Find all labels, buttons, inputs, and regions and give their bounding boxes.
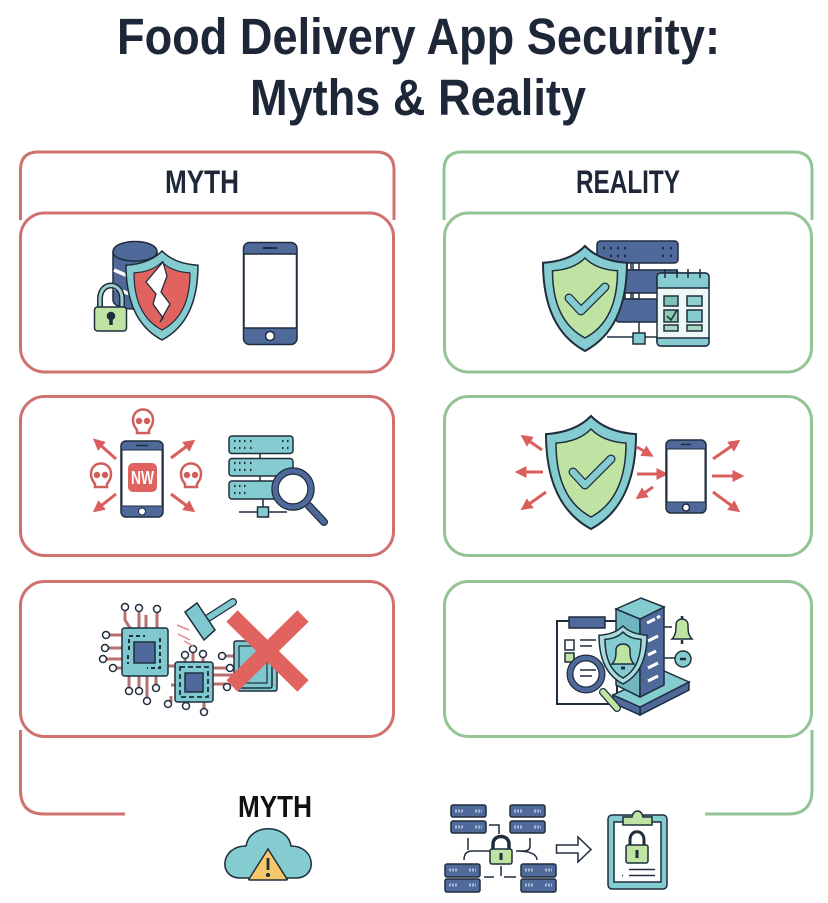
- panel: reality column frame: [444, 152, 812, 814]
- icon: blank phone: [244, 242, 297, 344]
- panel: myth 3: [20, 582, 394, 736]
- title: Myths & Reality: [250, 69, 587, 126]
- panel: myth 2: [20, 396, 394, 556]
- icon: circuit chips with hammer and red cross: [100, 602, 303, 716]
- icon: phone with app and skull threats: NW: [131, 468, 154, 488]
- icon: shield deflecting threats from phone: [520, 416, 739, 529]
- icon: cloud with warning triangle: [225, 829, 311, 880]
- panel: reality 2: [444, 396, 812, 556]
- panel: myth 1: [20, 213, 394, 372]
- icon: shield, servers and calendar: [543, 241, 709, 351]
- icon: server rack with magnifier: [229, 436, 324, 522]
- arrow: to clipboard: [556, 837, 591, 862]
- heading: bottom myth: MYTH: [238, 789, 312, 824]
- icon: server network with central lock: [445, 805, 556, 892]
- heading: myth: MYTH: [165, 164, 239, 200]
- icon: skull top: [133, 410, 153, 433]
- panel: myth column frame: [20, 152, 394, 814]
- heading: reality: REALITY: [576, 164, 680, 200]
- title: Food Delivery App Security:: [117, 8, 720, 65]
- panel: reality 3: [444, 582, 812, 736]
- icon: checklist with magnifier, server tower and alerts: [557, 598, 692, 715]
- icon: clipboard with lock: [608, 811, 667, 889]
- title: [117, 8, 720, 126]
- icon: database with broken shield and lock: [94, 242, 198, 340]
- icon: phone with app and skull threats: [91, 410, 201, 517]
- panel: reality 1: [444, 213, 812, 372]
